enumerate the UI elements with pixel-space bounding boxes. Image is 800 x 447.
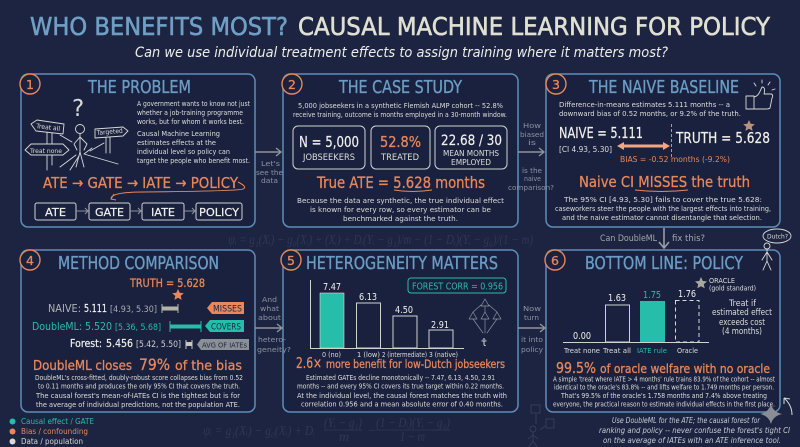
title	[30, 12, 771, 41]
text: GATE explanation: months -- and every 95% CI covers its true target within 0.22 months.	[297, 382, 504, 390]
stat card: mean months: 22.68 / 30	[441, 133, 502, 149]
row: DoubleML: 5.520	[85, 321, 112, 333]
text: treatment rule: exceeds cost	[719, 318, 766, 328]
text: problem description: works, but for whom it works best.	[137, 118, 244, 126]
text: GATE explanation	[297, 374, 507, 408]
text: policy explanation	[553, 376, 775, 408]
connector: how biased is the naive comparison: naive	[524, 175, 541, 183]
text: problem description: Causal Machine Learning	[137, 130, 220, 138]
connector: how biased is the naive comparison: biased	[520, 131, 544, 139]
bar chart: GATEs by Dutch proficiency: 2 (intermediate)	[382, 351, 427, 359]
text: synthetic data note	[297, 197, 504, 223]
heading: the naive baseline: THE NAIVE BASELINE	[588, 78, 739, 98]
connector: how biased is the naive comparison: is	[528, 139, 537, 147]
legend	[10, 417, 94, 446]
bar chart: welfare by policy	[563, 289, 709, 355]
badge 1: 1	[26, 77, 34, 92]
truth estimate: TRUTH = 5.628	[675, 129, 770, 147]
text: difference in means: downward bias of 0.52 months, or 9.2% of the truth.	[559, 110, 741, 118]
closing note	[599, 416, 791, 445]
pipeline boxes	[35, 203, 242, 220]
connector: let's see the data: Let's	[261, 160, 280, 168]
headline: 2.6x more benefit: more benefit for low-Dutch jobseekers	[326, 357, 505, 371]
text: why naive fails: and the naive estimator cannot disentangle that selection.	[562, 214, 762, 222]
icon: thumbs up	[746, 80, 775, 109]
text: synthetic data note: benchmarked against the truth.	[343, 215, 458, 223]
text: policy explanation: That's 99.5% of the oracle's 1.758 months and 7.4% above treating	[560, 392, 767, 400]
text: treatment rule: estimated effect	[712, 308, 773, 318]
text: GATE explanation: Estimated GATEs decline monotonically -- 7.47, 6.13, 4.50, 2.91	[306, 374, 495, 382]
icon: sparkle	[760, 404, 782, 424]
text: DoubleML explanation: DoubleML's cross-fitted, doubly-robust score collapses bias from 0.52	[35, 374, 243, 382]
heading: heterogeneity matters: HETEROGENEITY MATTERS	[306, 254, 498, 274]
headline: 99.5% of oracle welfare: of oracle welfare with no oracle	[600, 361, 770, 376]
truth marker: TRUTH = 5.628	[129, 276, 205, 290]
icon: causal forest trees	[469, 299, 501, 349]
badge 5	[281, 250, 301, 270]
badge 4: 4	[26, 253, 34, 268]
text: synthetic data note: Because the data are synthetic, the true individual effect	[297, 197, 504, 205]
text: why naive fails: The 95% CI [4.93, 5.30] fails to cover the true 5.628:	[563, 196, 762, 204]
stat card: treated	[371, 126, 430, 169]
pipeline boxes: ATE	[45, 206, 66, 219]
badge 3	[546, 74, 566, 94]
background formula bottom: (1 − Dᵢ)(Yᵢ − g₀)	[376, 416, 450, 431]
naive estimate: NAIVE = 5.111	[559, 124, 643, 142]
connector: now turn it into policy	[518, 305, 545, 354]
bias arrow: BIAS = -0.52 months (-9.2%)	[620, 155, 730, 164]
text: why naive fails	[555, 196, 771, 222]
text: DoubleML explanation: the average of individual predictions, not the population ATE.	[36, 401, 240, 409]
character: Dutch question figure: Dutch?	[767, 232, 788, 240]
badge 6: 6	[551, 253, 559, 268]
connector: let's see the data: see the	[256, 169, 283, 177]
naive estimate	[559, 124, 643, 154]
panel: method comparison	[20, 250, 255, 412]
headline: 2.6x more benefit	[296, 354, 505, 372]
character: Dutch question figure	[762, 229, 791, 270]
bar chart: welfare by policy: 0.00	[573, 331, 591, 342]
text: DoubleML explanation: The causal forest's mean-of-IATEs CI is the tightest but is for	[35, 392, 240, 400]
panel: the problem	[20, 74, 255, 227]
background formula bottom	[203, 416, 450, 445]
legend: Data / population	[21, 437, 83, 446]
naive estimate: [CI 4.93, 5.30]	[559, 145, 612, 154]
stat card: jobseekers	[293, 126, 365, 169]
headline: true ATE: True ATE = 5.628 months	[316, 173, 485, 192]
pipeline headline	[43, 174, 245, 200]
text: DoubleML explanation	[35, 374, 243, 409]
text: treatment rule: Treat if	[728, 299, 757, 309]
bias arrow	[617, 142, 730, 164]
headline: 2.6x more benefit: 2.6×	[296, 354, 322, 372]
bar chart: welfare by policy: 1.76	[678, 289, 696, 300]
connector: how biased is the naive comparison: is the	[522, 167, 542, 175]
row: naive	[48, 302, 244, 315]
bar chart: GATEs by Dutch proficiency: 0 (no)	[322, 351, 341, 359]
icon: causal forest trees: τ̂	[481, 337, 487, 349]
bar chart: welfare by policy: Treat all	[602, 347, 631, 355]
row: DoubleML: COVERS	[211, 322, 241, 332]
connector: can DoubleML fix this	[600, 228, 705, 248]
background formula bottom: ψᵢ = g₁(Xᵢ) − g₀(Xᵢ) + Dᵢ	[203, 424, 315, 439]
stat card: treated: 52.8%	[380, 133, 421, 151]
text: difference in means: Difference-in-means estimates 5.111 months -- a	[559, 101, 730, 109]
headline: closes 79% of bias: of the bias	[175, 358, 242, 374]
text: problem description: A government wants to know not just	[137, 100, 250, 108]
illustration: person at crossroads: ?	[72, 96, 84, 122]
truth estimate	[672, 120, 770, 157]
row: DoubleML	[32, 320, 244, 333]
row: forest: AVG OF IATEs	[202, 342, 247, 350]
background formula top: ψᵢ = g₁(Xᵢ) − g₀(Xᵢ) + (Xᵢ) + Dᵢ(Yᵢ − g₁)/m − (1 − Dᵢ)(Yᵢ − g₀)/(1 − m)	[228, 233, 533, 248]
legend: Causal effect / GATE	[21, 417, 94, 426]
row: naive: 5.111	[84, 303, 107, 315]
badge 6	[545, 250, 565, 270]
title: WHO BENEFITS MOST?	[30, 12, 288, 41]
text: cohort description: receive training, outcome is months employed in a 30-month window.	[293, 111, 507, 119]
text: problem description	[137, 100, 250, 165]
row: forest: 5.456	[106, 338, 133, 350]
heading: the problem: THE PROBLEM	[87, 78, 191, 98]
badge 4	[20, 250, 40, 270]
text: treatment rule	[712, 299, 773, 337]
badge 3: 3	[552, 77, 560, 92]
bar chart: welfare by policy: 1.63	[608, 293, 626, 304]
bar chart: welfare by policy: Treat none	[563, 347, 600, 355]
subtitle: Can we use individual treatment effects to assign training where it matters most?	[135, 45, 669, 61]
text: cohort description	[293, 102, 507, 119]
text: cohort description: 5,000 jobseekers in a synthetic Flemish ALMP cohort -- 52.8%	[298, 102, 503, 110]
text: problem description: whether a job-training programme	[137, 109, 243, 117]
connector: and what about heterogeneity: what	[260, 305, 279, 313]
forest correlation badge	[408, 278, 506, 293]
connector: and what about heterogeneity: hetero-	[258, 336, 287, 344]
forest correlation badge: FOREST CORR = 0.956	[412, 282, 503, 292]
badge 2: 2	[288, 77, 296, 92]
connector: now turn it into policy: turn	[524, 314, 539, 322]
connector: now turn it into policy: Now	[523, 305, 541, 313]
text: problem description: individual level so policy can	[137, 148, 230, 156]
pipeline boxes: POLICY	[199, 206, 239, 219]
connector: and what about heterogeneity: geneity?	[257, 346, 291, 354]
headline: closes 79% of bias: DoubleML closes	[33, 358, 132, 374]
illustration: person at crossroads: Targeted	[96, 127, 123, 137]
connector: can DoubleML fix this: fix this?	[672, 234, 705, 244]
legend: Bias / confounding	[21, 427, 88, 436]
background formula bottom: 1 − m	[400, 430, 425, 445]
connector: and what about heterogeneity: And	[262, 296, 277, 304]
connector: now turn it into policy: policy	[521, 346, 543, 354]
row: naive: NAIVE:	[48, 303, 81, 315]
pipeline boxes: GATE	[95, 206, 124, 219]
pipeline boxes: IATE	[151, 206, 175, 219]
row: naive: MISSES	[213, 304, 242, 314]
bar chart: welfare by policy: IATE rule	[637, 347, 667, 355]
panel: the naive baseline	[546, 74, 780, 227]
connector: and what about heterogeneity: about	[258, 314, 281, 322]
connector: how biased is the naive comparison	[508, 122, 554, 192]
text: problem description: target the people who benefit most.	[137, 157, 250, 165]
stat card: jobseekers: JOBSEEKERS	[302, 153, 355, 163]
text: why naive fails: caseworkers steer the people with the largest effects into training,	[555, 205, 771, 213]
bar chart: welfare by policy: Oracle	[677, 347, 698, 355]
headline: 99.5% of oracle welfare	[556, 359, 770, 377]
oracle legend	[695, 277, 756, 292]
truth marker	[129, 276, 205, 300]
heading: the case study: THE CASE STUDY	[338, 78, 462, 98]
text: GATE explanation: At the individual level, the causal forest matches the truth with	[297, 392, 507, 400]
bar chart: GATEs by Dutch proficiency: 4.50	[395, 305, 413, 316]
row: DoubleML: [5.36, 5.68]	[115, 323, 161, 333]
row: forest: [5.42, 5.50]	[136, 340, 181, 350]
connector: can DoubleML fix this: Can DoubleML	[600, 234, 657, 244]
headline: closes 79% of bias: 79%	[139, 355, 170, 374]
heading: method comparison: METHOD COMPARISON	[58, 254, 219, 274]
headline: naive CI misses: Naive CI MISSES the truth	[579, 173, 750, 191]
connector: now turn it into policy: it into	[521, 336, 543, 344]
text: synthetic data note: is known for every row, so every estimator can be	[310, 206, 491, 214]
row: naive: [4.93, 5.30]	[110, 305, 157, 315]
text: GATE explanation: correlation 0.956 and a mean absolute error of 0.40 months.	[301, 400, 503, 408]
heading: bottom line policy: BOTTOM LINE: POLICY	[585, 254, 743, 274]
connector: and what about heterogeneity	[255, 296, 291, 354]
icon: curved arrow	[784, 398, 792, 415]
bar chart: GATEs by Dutch proficiency: 7.47	[323, 282, 341, 293]
bar chart: welfare by policy: 1.75	[643, 290, 661, 301]
stat card: jobseekers: N = 5,000	[299, 133, 359, 151]
row: DoubleML: DoubleML:	[32, 321, 82, 333]
illustration: person at crossroads: Treat none	[29, 147, 62, 155]
background formula bottom: m	[339, 430, 349, 445]
row: forest: Forest:	[70, 338, 102, 350]
stat card: mean months	[435, 126, 507, 169]
bar chart: GATEs by Dutch proficiency: 1 (low)	[357, 351, 380, 359]
illustration: person at crossroads	[25, 96, 128, 170]
badge 5: 5	[287, 253, 295, 268]
closing note: on the average of IATEs with an ATE inference tool.	[603, 436, 781, 445]
headline: closes 79% of bias	[33, 355, 242, 374]
badge 1	[20, 74, 40, 94]
bar chart: GATEs by Dutch proficiency: 6.13	[359, 292, 377, 303]
bar chart: GATEs by Dutch proficiency	[310, 280, 464, 359]
panel: heterogeneity matters	[281, 250, 518, 412]
text: difference in means	[559, 101, 741, 118]
stat card: mean months: MEAN MONTHS	[443, 149, 499, 158]
stat card: treated: TREATED	[380, 153, 419, 163]
panel: bottom line policy	[545, 250, 780, 412]
pipeline headline: ATE → GATE → IATE → POLICY	[43, 174, 239, 192]
connector: how biased is the naive comparison: How	[523, 122, 541, 130]
text: treatment rule: (4 months)	[722, 327, 762, 337]
text: problem description: estimates effects at the	[137, 139, 216, 147]
background formula bottom: (Yᵢ − g₁)	[324, 416, 362, 431]
background formula bottom: −	[367, 424, 376, 439]
connector: let's see the data: data	[261, 177, 278, 185]
text: DoubleML explanation: to 0.11 months and produces the only 95% CI that covers the truth.	[38, 382, 240, 390]
bar chart: GATEs by Dutch proficiency: 2.91	[431, 320, 449, 331]
oracle legend: ORACLE	[709, 277, 735, 285]
panel: the case study	[282, 74, 518, 227]
headline: 99.5% of oracle welfare: 99.5%	[556, 359, 596, 377]
row: forest	[70, 338, 249, 350]
oracle legend: (gold standard)	[709, 284, 756, 292]
illustration: person at crossroads: Treat all	[35, 122, 61, 133]
stat card: mean months: EMPLOYED	[451, 158, 491, 167]
connector: how biased is the naive comparison: comparison?	[508, 184, 554, 192]
closing note: Use DoubleML for the ATE; the causal forest for	[612, 416, 761, 425]
title: CAUSAL MACHINE LEARNING FOR POLICY	[298, 12, 771, 41]
bar chart: GATEs by Dutch proficiency: 3 (native)	[429, 351, 458, 359]
connector: let's see the data	[255, 148, 283, 185]
icon: sketch figure with charts	[528, 405, 554, 447]
badge 2	[282, 74, 302, 94]
